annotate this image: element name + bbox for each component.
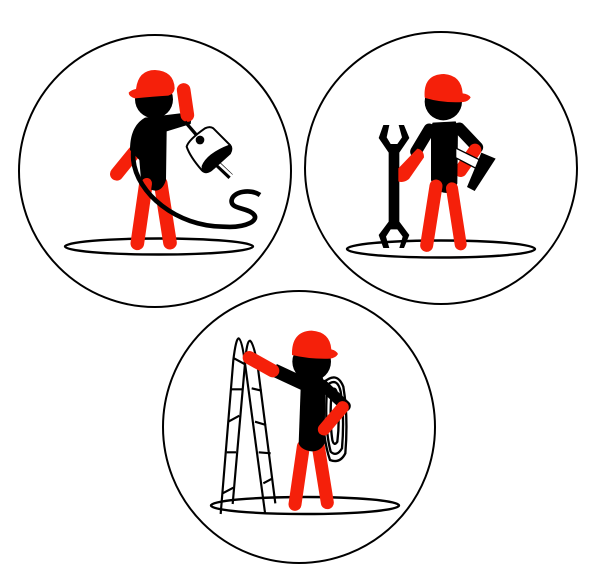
plug pin <box>216 163 231 177</box>
figure: mechanic with wrench and hammer <box>379 74 496 248</box>
hammer head <box>467 153 496 191</box>
panel: ladder worker badge <box>163 291 435 563</box>
torso <box>431 121 458 193</box>
leg overlap <box>145 183 147 195</box>
near arm <box>398 149 424 182</box>
hard hat <box>129 70 175 98</box>
panel: electrician badge <box>19 35 291 307</box>
figure: worker with ladder and coil <box>221 331 346 514</box>
badge circle: mechanic <box>305 32 577 304</box>
arm far <box>461 150 475 171</box>
power cable <box>133 125 260 227</box>
raised arm black <box>274 370 304 384</box>
raised arm red <box>249 358 273 371</box>
head <box>292 342 331 381</box>
panel: mechanic badge <box>305 32 577 304</box>
head <box>425 83 462 120</box>
figure: electrician with plug <box>117 70 260 243</box>
hard hat <box>425 74 471 102</box>
shoulder arm <box>323 385 345 406</box>
wrench <box>379 125 409 248</box>
hard hat <box>292 331 338 359</box>
plug cap <box>202 145 231 172</box>
ground ellipse: ladder worker <box>211 497 399 514</box>
plug dot <box>196 136 204 144</box>
rope coil <box>322 377 346 461</box>
bent arm red <box>324 407 343 429</box>
ground ellipse: electrician <box>65 238 253 254</box>
badge circle: ladder worker <box>163 291 435 563</box>
head <box>135 80 173 118</box>
badge circle: electrician <box>19 35 291 307</box>
left arm <box>117 153 134 174</box>
legs <box>427 186 461 245</box>
torso <box>299 377 325 451</box>
plug pin highlight <box>218 163 233 177</box>
ladder <box>221 338 275 514</box>
cable top <box>185 122 197 136</box>
black upper arms <box>416 128 477 152</box>
torso <box>130 113 191 191</box>
legs <box>137 183 170 243</box>
hammer handle <box>456 148 480 168</box>
plug body <box>187 127 231 172</box>
legs <box>295 447 327 504</box>
raised arm <box>184 90 187 115</box>
ground ellipse: mechanic <box>347 240 535 258</box>
